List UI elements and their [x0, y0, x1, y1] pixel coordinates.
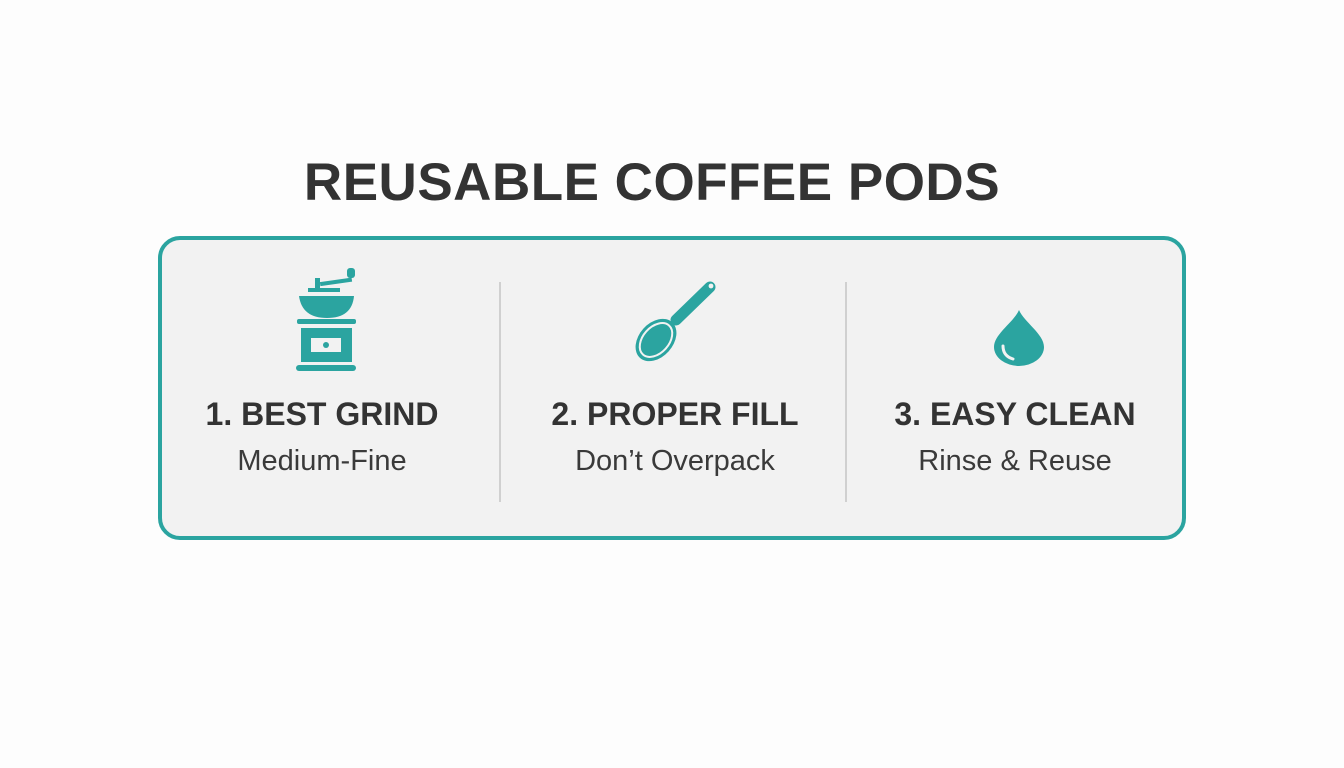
- heading: 3. EASY CLEAN: [894, 396, 1136, 432]
- title: REUSABLE COFFEE PODS: [304, 153, 1000, 212]
- column: easy clean: [894, 310, 1136, 477]
- subtitle: Rinse & Reuse: [918, 445, 1112, 477]
- panel: steps: [158, 236, 1186, 540]
- icon: spoon: [636, 282, 716, 362]
- heading: 2. PROPER FILL: [551, 396, 799, 432]
- subtitle: Medium-Fine: [237, 445, 407, 477]
- heading: 1. BEST GRIND: [206, 396, 438, 432]
- icon: coffee grinder: [296, 268, 356, 371]
- column: proper fill: [551, 282, 799, 477]
- icon: water drop: [994, 310, 1044, 366]
- column: best grind: [206, 268, 438, 477]
- subtitle: Don’t Overpack: [575, 445, 775, 477]
